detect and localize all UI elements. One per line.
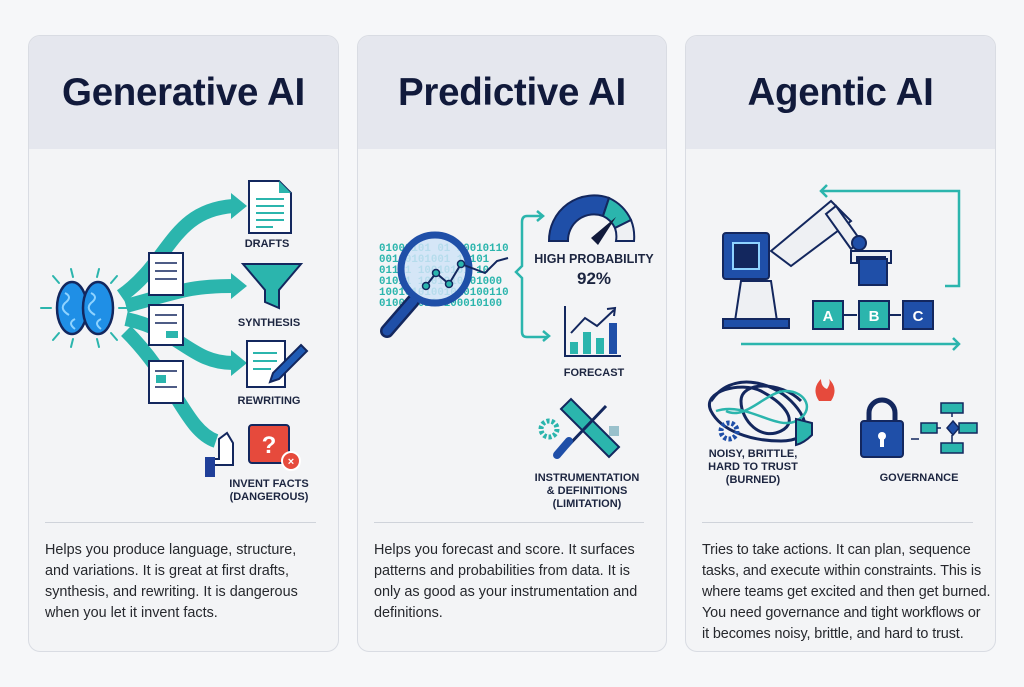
text: agentic description: tasks, and execute within constraints. This is bbox=[702, 563, 981, 579]
icon: tools: INSTRUMENTATION bbox=[535, 472, 639, 484]
heading: Generative AI: Generative AI bbox=[62, 70, 305, 114]
icon: tangle: HARD TO TRUST bbox=[708, 461, 798, 473]
icon: magnifier bbox=[387, 235, 508, 331]
icon: forecast chart: FORECAST bbox=[564, 367, 625, 379]
heading: Predictive AI: Predictive AI bbox=[398, 70, 626, 114]
heading: Predictive AI bbox=[358, 36, 666, 149]
icon: tangle: (BURNED) bbox=[726, 474, 781, 486]
text: generative description: when you let it invent facts. bbox=[45, 605, 218, 621]
text: generative description: synthesis, and rewriting. It is dangerous bbox=[45, 584, 298, 600]
icon: gauge bbox=[534, 195, 654, 288]
panel: generative AI bbox=[28, 35, 339, 652]
icon: drafts document bbox=[245, 181, 291, 250]
icon: tools bbox=[535, 399, 639, 510]
panel: agentic AI bbox=[685, 35, 996, 652]
icon: invent facts danger: (DANGEROUS) bbox=[230, 491, 309, 503]
icon: lock and flowchart governance bbox=[861, 400, 977, 484]
icon: invent facts danger: INVENT FACTS bbox=[229, 478, 309, 490]
icons: A B C steps bbox=[813, 301, 933, 329]
icon: tangle: NOISY, BRITTLE, bbox=[709, 448, 797, 460]
text: agentic description bbox=[702, 542, 990, 642]
icon: synthesis funnel: SYNTHESIS bbox=[238, 317, 300, 329]
text: predictive description bbox=[374, 542, 637, 621]
illustration: predictive bbox=[379, 194, 654, 510]
arrow: bracket bbox=[516, 211, 549, 341]
icons: A B C steps: C bbox=[913, 308, 924, 325]
arrows: teal flows bbox=[121, 206, 233, 441]
binary data: 00100101001 10101 bbox=[379, 254, 490, 266]
text: agentic description: Tries to take actions. It can plan, sequence bbox=[702, 542, 971, 558]
heading: Agentic AI bbox=[686, 36, 995, 149]
icon: forecast chart bbox=[564, 306, 625, 379]
text: predictive description: patterns and probabilities from data. It is bbox=[374, 563, 630, 579]
binary data: 01000101 01 10010110 bbox=[379, 243, 509, 255]
binary data: 01001 0100100010100 bbox=[379, 298, 502, 310]
icons: A B C steps: B bbox=[869, 308, 880, 325]
heading: Agentic AI: Agentic AI bbox=[748, 70, 933, 114]
text: predictive description: only as good as your instrumentation and bbox=[374, 584, 637, 600]
text: agentic description: it becomes noisy, brittle, and hard to trust. bbox=[702, 626, 964, 642]
text: generative description: and variations. It is great at first drafts, bbox=[45, 563, 289, 579]
text: generative description bbox=[45, 542, 298, 621]
text: generative description: Helps you produce language, structure, bbox=[45, 542, 296, 558]
icons: small docs bbox=[149, 253, 183, 403]
icon: brain bbox=[41, 269, 129, 347]
icon: invent facts danger: × bbox=[288, 456, 294, 468]
icon: gauge: HIGH PROBABILITY bbox=[534, 252, 654, 266]
icon: rewriting bbox=[238, 341, 307, 407]
text: predictive description: definitions. bbox=[374, 605, 443, 621]
icon: gauge: 92% bbox=[577, 269, 611, 288]
binary data: 01011 1001010101000 bbox=[379, 276, 502, 288]
icon: rewriting: REWRITING bbox=[238, 395, 300, 407]
icon: invent facts danger bbox=[205, 425, 309, 503]
text: agentic description: You need governance and tight workflows or bbox=[702, 605, 980, 621]
icon: robot arm bbox=[723, 201, 891, 328]
illustration: agentic bbox=[708, 184, 978, 486]
icon: tools: (LIMITATION) bbox=[553, 498, 622, 510]
illustration: generative flows bbox=[40, 180, 309, 503]
icon: drafts document: DRAFTS bbox=[245, 238, 289, 250]
loop arrows bbox=[741, 185, 959, 350]
icon: tangle bbox=[708, 379, 835, 486]
text: predictive description: Helps you forecast and score. It surfaces bbox=[374, 542, 635, 558]
binary data bbox=[379, 243, 509, 310]
icon: tools: & DEFINITIONS bbox=[547, 485, 627, 497]
heading: Generative AI bbox=[29, 36, 338, 149]
text: agentic description: where teams get excited and then get burned. bbox=[702, 584, 990, 600]
icons: A B C steps: A bbox=[823, 308, 834, 325]
binary data: 01101 10010101 10 bbox=[379, 265, 489, 277]
icon: lock and flowchart governance: GOVERNANCE bbox=[880, 472, 958, 484]
panel: predictive AI bbox=[357, 35, 667, 652]
icon: synthesis funnel bbox=[238, 264, 301, 329]
icon: invent facts danger: ? bbox=[262, 432, 276, 459]
binary data: 10010101001010100110 bbox=[379, 287, 509, 299]
